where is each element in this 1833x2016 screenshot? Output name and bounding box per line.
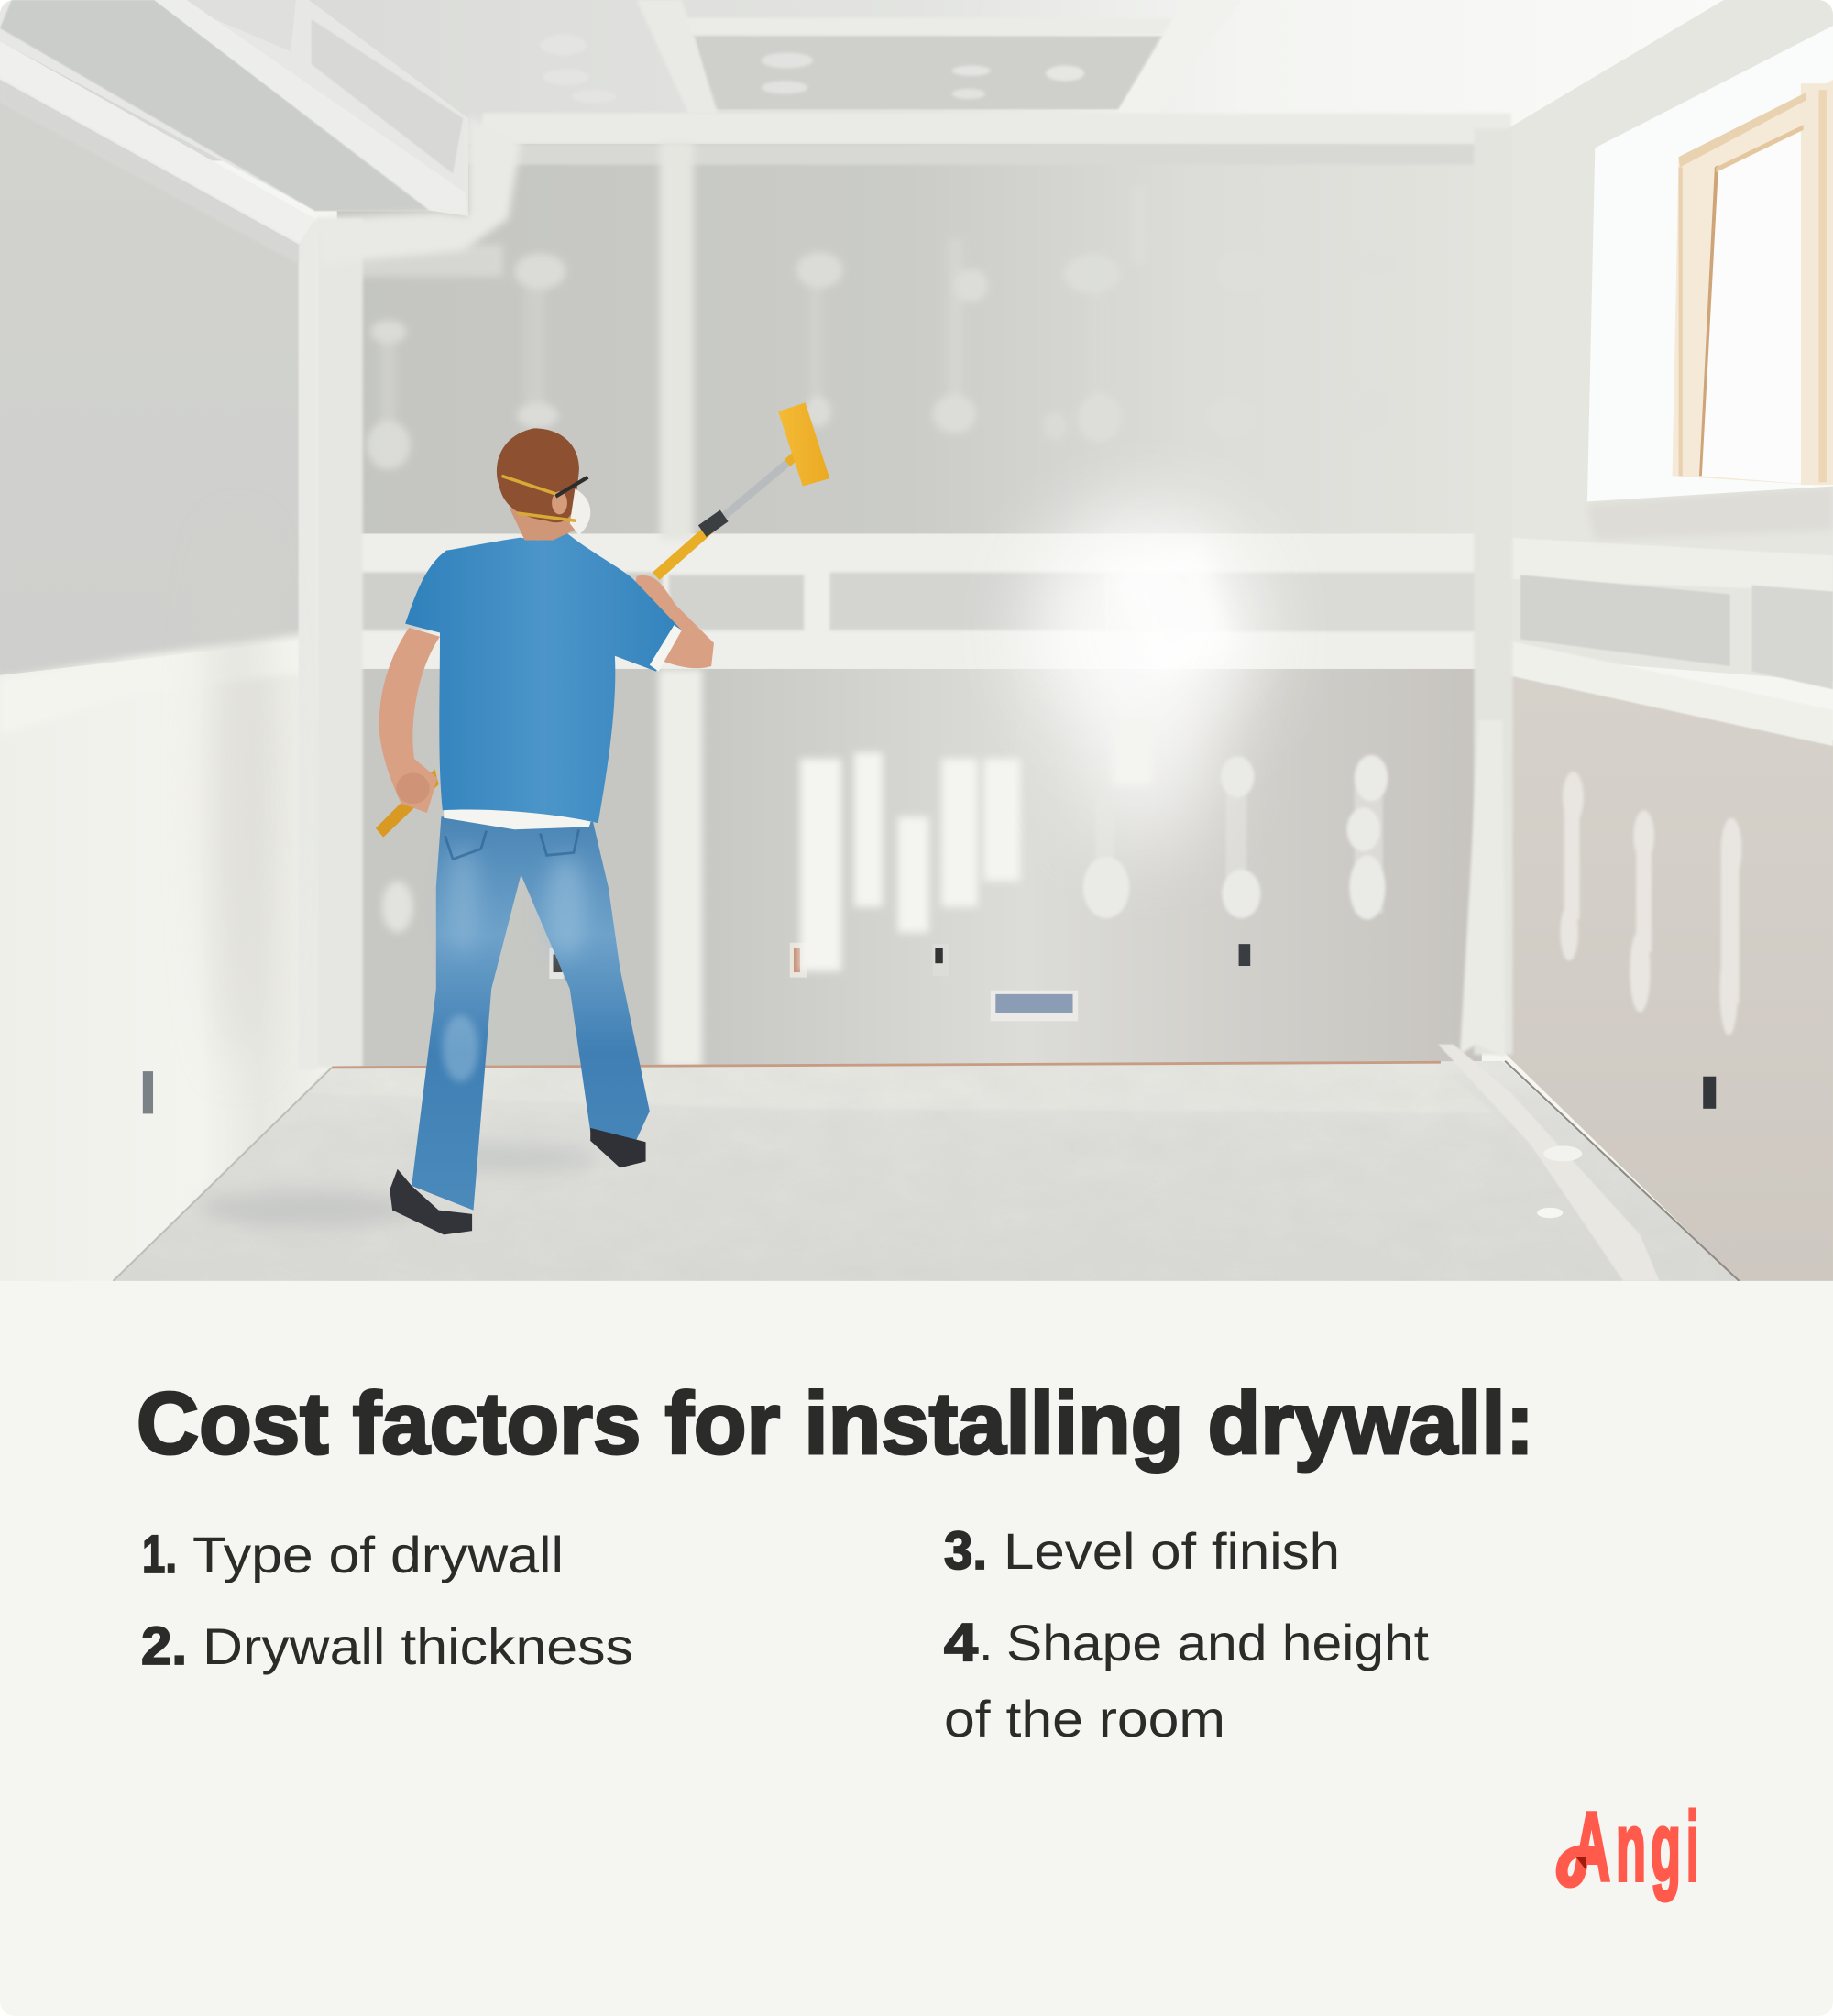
left boot — [390, 1169, 472, 1234]
hand on hammer — [396, 772, 430, 804]
hair and head — [497, 428, 579, 522]
right boot — [590, 1128, 646, 1167]
text and logo area: i — [1686, 1791, 1698, 1901]
t-shirt — [405, 532, 682, 823]
wall outlets and vent — [143, 941, 1716, 1113]
drywall mud patches — [367, 187, 1400, 469]
sleeve trim — [650, 625, 682, 672]
list item 1: Type of drywall — [192, 1526, 564, 1583]
list item 3: Level of finish — [1004, 1522, 1340, 1580]
list item 3: 3. — [944, 1521, 987, 1581]
list item 4 — [944, 1613, 1429, 1748]
jeans — [412, 816, 650, 1211]
photo: man sanding drywall in an unfinished room — [0, 0, 1833, 1281]
floor — [112, 1044, 1740, 1281]
title: Cost factors for installing drywall: — [137, 1375, 1534, 1473]
left wall — [0, 41, 363, 1281]
ceiling — [0, 0, 1833, 160]
sunlight on the back wall — [382, 508, 1741, 1035]
list item 1: 1. — [142, 1525, 177, 1584]
right arm — [631, 575, 714, 668]
dust mask — [570, 488, 590, 535]
left arm — [379, 628, 440, 813]
list item 4: Shape and height — [1006, 1614, 1429, 1671]
neck — [510, 508, 575, 540]
ear — [552, 491, 567, 514]
sander pad — [778, 402, 829, 487]
Angi logo: g — [1651, 1791, 1681, 1901]
ceiling soffit — [0, 0, 521, 264]
sanding pole — [376, 443, 810, 838]
undershirt — [444, 807, 594, 829]
man sanding the wall — [376, 402, 829, 1234]
right wall — [1460, 0, 1833, 1281]
safety glasses — [555, 477, 587, 497]
Angi logo — [1562, 1791, 1698, 1901]
list item 2: Drywall thickness — [203, 1617, 633, 1675]
list item 4: of the room — [944, 1690, 1225, 1748]
list item 4: 4 — [944, 1613, 978, 1672]
list item 4: . — [979, 1614, 993, 1671]
mask straps — [501, 476, 576, 520]
back wall — [337, 141, 1482, 1070]
window — [1587, 26, 1833, 501]
Angi logo: A — [1573, 1791, 1610, 1901]
list item 2: 2. — [141, 1616, 187, 1676]
Angi logo: n — [1616, 1791, 1646, 1901]
